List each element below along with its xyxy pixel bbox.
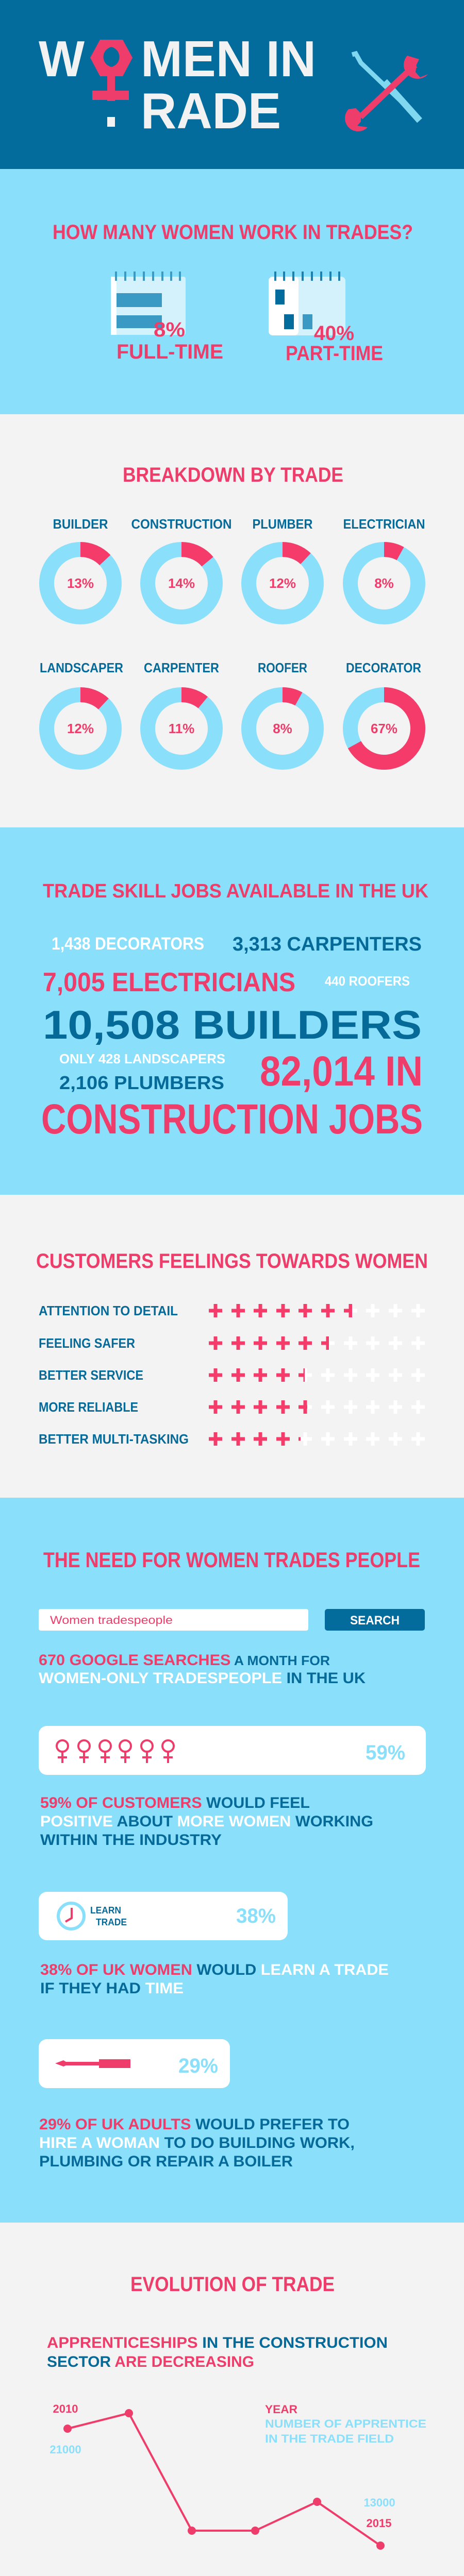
rating row: attention to detail: ATTENTION TO DETAIL	[39, 1303, 178, 1318]
rating row: better service: BETTER SERVICE	[39, 1367, 143, 1383]
stat text: 59% of customers: 59% OF CUSTOMERS WOULD FEEL	[40, 1794, 310, 1811]
stat text: 670 google searches: 670 GOOGLE SEARCHES A MONTH FOR	[39, 1652, 330, 1669]
icon: crossed screwdriver and wrench	[345, 54, 428, 131]
stat text: 29% of uk adults: HIRE A WOMAN TO DO BUILDING WORK,	[39, 2134, 355, 2151]
rating row: better multi-tasking: BETTER MULTI-TASKING	[39, 1431, 189, 1447]
panel: 29% tool icon	[39, 2039, 230, 2088]
donut chart: landscaper 12%	[40, 660, 123, 762]
donut chart: builder 13%: 13%	[67, 575, 94, 591]
rating row: better service	[39, 1368, 425, 1382]
search bar	[39, 1609, 425, 1631]
panel: 38% learn trade clock: TRADE	[96, 1917, 127, 1927]
stat text: 670 google searches	[39, 1652, 366, 1687]
stat text: 38% of uk women: 38% OF UK WOMEN WOULD LEARN A TRADE	[40, 1961, 389, 1978]
donut chart: construction 14%	[131, 516, 232, 617]
subheading: apprenticeships decreasing: APPRENTICESHIPS IN THE CONSTRUCTION	[47, 2334, 388, 2351]
donut chart: plumber 12%: 12%	[269, 575, 296, 591]
panel: 59% venus icons: 59%	[366, 1741, 405, 1764]
panel: 38% learn trade clock: 38%	[236, 1905, 276, 1927]
stat text: 59% of customers	[40, 1794, 373, 1849]
title: Women in Trade: MEN IN	[141, 30, 316, 87]
heading: customers feelings towards women: CUSTOMERS FEELINGS TOWARDS WOMEN	[36, 1250, 428, 1273]
donut chart: carpenter 11%: CARPENTER	[144, 660, 219, 675]
icon: venus nut symbol	[90, 40, 132, 127]
line chart: apprenticeships 2010-2015: 21000	[49, 2443, 81, 2456]
stat: 40% part-time: PART-TIME	[286, 342, 383, 365]
donut chart: construction 14%: CONSTRUCTION	[131, 516, 232, 532]
donut chart: carpenter 11%: 11%	[169, 721, 194, 736]
rating row: more reliable: MORE RELIABLE	[39, 1399, 138, 1415]
line chart: apprenticeships 2010-2015: 2010	[53, 2402, 78, 2415]
stat: 40% part-time	[286, 322, 383, 365]
icon: full-time notepad	[111, 272, 186, 335]
panel: 38% learn trade clock: LEARN	[90, 1905, 121, 1916]
title: Women in Trade	[39, 30, 316, 139]
line chart: apprenticeships 2010-2015: 13000	[363, 2496, 395, 2509]
line chart: apprenticeships 2010-2015	[49, 2402, 395, 2550]
donut chart: builder 13%: BUILDER	[53, 516, 108, 532]
stat text: 59% of customers: POSITIVE ABOUT MORE WOMEN WORKING	[40, 1813, 373, 1830]
donut chart: roofer 8%: ROOFER	[258, 660, 307, 675]
legend: apprenticeship chart	[265, 2403, 426, 2445]
word cloud: job counts: 3,313 CARPENTERS	[233, 934, 422, 955]
stat: 8% full-time: FULL-TIME	[117, 341, 223, 363]
donut chart: roofer 8%	[248, 660, 317, 762]
heading: how many women work in trades: HOW MANY WOMEN WORK IN TRADES?	[53, 221, 413, 244]
stat text: 59% of customers: WITHIN THE INDUSTRY	[40, 1832, 222, 1849]
donut chart: landscaper 12%: 12%	[67, 721, 94, 736]
stat text: 29% of uk adults	[39, 2116, 355, 2170]
legend: apprenticeship chart: NUMBER OF APPRENTICE	[265, 2417, 426, 2430]
word cloud: job counts	[41, 934, 423, 1143]
search bar: Women tradespeople	[50, 1614, 173, 1626]
donut chart: decorator 67%: 67%	[371, 721, 397, 736]
donut chart: carpenter 11%	[144, 660, 219, 762]
donut chart: decorator 67%	[346, 660, 421, 762]
panel: 59% venus icons	[39, 1726, 426, 1775]
donut chart: electrician 8%: ELECTRICIAN	[343, 516, 425, 532]
donut chart: roofer 8%: 8%	[273, 721, 292, 736]
donut chart: electrician 8%: 8%	[374, 575, 394, 591]
heading: evolution of trade: EVOLUTION OF TRADE	[130, 2273, 335, 2296]
title: Women in Trade: W	[39, 30, 85, 87]
panel: 38% learn trade clock	[39, 1892, 288, 1940]
line chart: apprenticeships 2010-2015: 2015	[367, 2517, 391, 2530]
donut chart: plumber 12%: PLUMBER	[253, 516, 313, 532]
title: Women in Trade: RADE	[141, 82, 281, 139]
word cloud: job counts: 2,106 PLUMBERS	[59, 1072, 224, 1093]
legend: apprenticeship chart: IN THE TRADE FIELD	[265, 2432, 394, 2445]
rating row: better multi-tasking	[39, 1432, 425, 1446]
rating row: feeling safer: FEELING SAFER	[39, 1335, 135, 1351]
word cloud: job counts: 1,438 DECORATORS	[52, 934, 204, 954]
word cloud: job counts: ONLY 428 LANDSCAPERS	[59, 1051, 225, 1066]
stat: 8% full-time: 8%	[154, 318, 185, 341]
word cloud: job counts: 7,005 ELECTRICIANS	[43, 968, 295, 997]
donut chart: builder 13%	[46, 516, 114, 617]
subheading: apprenticeships decreasing: SECTOR ARE DECREASING	[47, 2353, 254, 2370]
stat text: 670 google searches: WOMEN-ONLY TRADESPEOPLE IN THE UK	[39, 1670, 366, 1687]
search bar: SEARCH	[350, 1614, 400, 1628]
heading: trade skill jobs available: TRADE SKILL JOBS AVAILABLE IN THE UK	[43, 880, 429, 902]
stat text: 29% of uk adults: PLUMBING OR REPAIR A BOILER	[39, 2153, 293, 2170]
stat: 40% part-time: 40%	[314, 322, 354, 345]
rating row: more reliable	[39, 1400, 425, 1414]
subheading: apprenticeships decreasing	[47, 2334, 388, 2370]
heading: breakdown by trade: BREAKDOWN BY TRADE	[123, 464, 343, 486]
stat text: 38% of uk women	[40, 1961, 389, 1997]
donut chart: construction 14%: 14%	[168, 575, 195, 591]
stat: 8% full-time	[117, 318, 223, 363]
word cloud: job counts: 440 ROOFERS	[325, 973, 410, 989]
stat text: 38% of uk women: IF THEY HAD TIME	[40, 1980, 184, 1997]
word cloud: job counts: 10,508 BUILDERS	[43, 1002, 422, 1047]
donut chart: decorator 67%: DECORATOR	[346, 660, 421, 675]
donut chart: landscaper 12%: LANDSCAPER	[40, 660, 123, 675]
word cloud: job counts: 82,014 IN	[260, 1048, 423, 1095]
icon: part-time notepad	[269, 272, 345, 335]
panel: 29% tool icon: 29%	[178, 2055, 218, 2077]
legend: apprenticeship chart: YEAR	[265, 2403, 297, 2416]
stat text: 29% of uk adults: 29% OF UK ADULTS WOULD PREFER TO	[39, 2116, 350, 2133]
rating row: feeling safer	[39, 1336, 425, 1350]
donut chart: plumber 12%	[248, 516, 317, 617]
rating row: attention to detail	[39, 1304, 425, 1317]
donut chart: electrician 8%	[343, 516, 425, 617]
